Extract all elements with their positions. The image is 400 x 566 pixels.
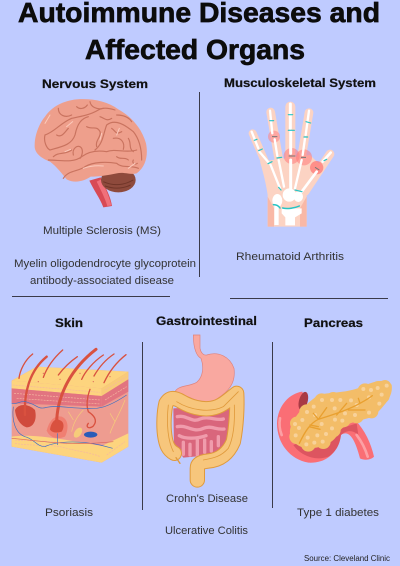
- icon: hand: [252, 104, 331, 227]
- icon: pancreas: [277, 380, 392, 463]
- icon: skin cross-section: [12, 349, 128, 463]
- panel: nervous system: [14, 77, 196, 287]
- text: ulcerative colitis: Ulcerative Colitis: [165, 525, 248, 537]
- text: multiple sclerosis: Multiple Sclerosis (MS): [43, 225, 161, 237]
- text: crohn's disease: Crohn's Disease: [166, 493, 248, 505]
- panel: skin: [12, 316, 128, 519]
- text: rheumatoid arthritis: Rheumatoid Arthritis: [236, 251, 345, 263]
- heading: pancreas: Pancreas: [304, 316, 363, 330]
- panel: pancreas: [277, 316, 392, 519]
- text: type 1 diabetes: Type 1 diabetes: [297, 507, 380, 519]
- text: myelin disease: Myelin oligodendrocyte glycoprotein: [14, 258, 196, 270]
- heading: skin: Skin: [55, 316, 83, 330]
- title: [18, 0, 380, 65]
- text: myelin disease: [14, 258, 196, 287]
- text: myelin disease: antibody-associated disease: [30, 275, 174, 287]
- source note: Source: Cleveland Clinic: [304, 554, 390, 563]
- heading: nervous system: Nervous System: [42, 77, 148, 91]
- heading: gastrointestinal: Gastrointestinal: [156, 314, 257, 328]
- title: Affected Organs: [85, 34, 305, 65]
- icon: digestive system: [164, 335, 238, 480]
- text: psoriasis: Psoriasis: [45, 507, 94, 519]
- panel: musculoskeletal system: [224, 76, 376, 263]
- heading: musculoskeletal system: Musculoskeletal System: [224, 76, 376, 90]
- icon: brain: [35, 99, 147, 207]
- panel: gastrointestinal: [156, 314, 257, 537]
